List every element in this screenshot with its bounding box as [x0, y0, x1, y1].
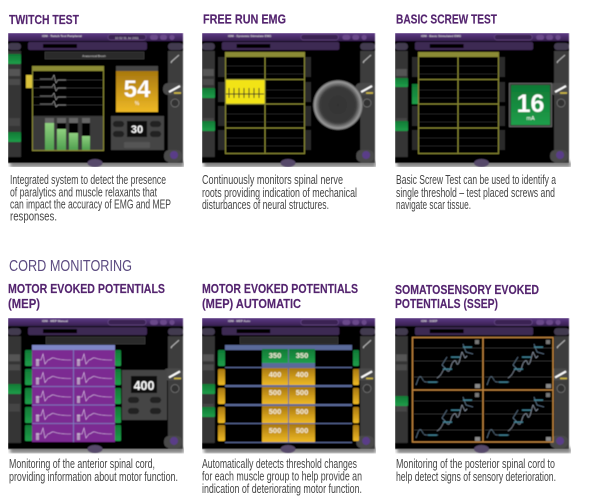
waveform and bar panel [32, 66, 104, 150]
heading: mep [8, 281, 165, 311]
ssep grid [412, 337, 554, 442]
stimulation panel [111, 116, 164, 150]
title bar: Anatomical Brush [82, 54, 106, 58]
screen: mep: IOM - MEP Manual [42, 319, 68, 323]
threshold grid: 500 [269, 388, 281, 397]
title bar [45, 52, 144, 59]
sidebar buttons [395, 78, 408, 131]
heading: ssep: POTENTIALS (SSEP) [395, 296, 498, 311]
caption: twitch test: can impact the accuracy of EMG and MEP [10, 198, 171, 212]
caption: mep: Monitoring of the anterior spinal cord, [9, 457, 155, 471]
screen: twitch test [8, 33, 184, 167]
caption: free run emg: disturbances of neural structures. [202, 198, 329, 212]
heading: twitch test: TWITCH TEST [9, 12, 79, 27]
caption: free run emg: roots providing indication of mechanical [202, 186, 357, 200]
screen: ssep [395, 318, 571, 453]
caption: basic screw test: navigate scar tissue. [396, 198, 471, 212]
title bar [46, 337, 145, 344]
title bar [240, 337, 338, 344]
heading: ssep: SOMATOSENSORY EVOKED [395, 282, 539, 297]
threshold readout: mA [526, 116, 535, 122]
caption: mep automatic: indication of deteriorating motor function. [202, 482, 362, 496]
ratio readout: % [135, 101, 140, 107]
threshold grid: 500 [296, 426, 308, 435]
stimulation panel [122, 370, 167, 420]
threshold grid: 400 [269, 370, 281, 379]
caption: mep [9, 457, 178, 484]
screen: free run emg: IOM - Systemic Stimulate EMG [228, 34, 272, 38]
threshold readout: 16 [517, 90, 544, 118]
caption: twitch test: of paralytics and muscle relaxants that [10, 186, 157, 200]
threshold grid: 350 [296, 351, 308, 360]
heading: mep automatic: (MEP) AUTOMATIC [202, 296, 302, 311]
threshold grid: 400 [296, 370, 308, 379]
threshold grid [218, 345, 359, 443]
screen: mep [8, 318, 184, 453]
heading: mep: (MEP) [8, 296, 40, 311]
caption: mep: providing information about motor function. [9, 470, 178, 484]
heading: mep: MOTOR EVOKED POTENTIALS [8, 281, 165, 296]
heading: free run emg: FREE RUN EMG [203, 12, 286, 26]
screen: mep automatic: IOM - MEP Auto [228, 319, 250, 323]
heading: mep automatic [202, 281, 358, 311]
stimulation panel: 30 [131, 124, 143, 136]
caption: mep automatic [202, 457, 362, 496]
threshold grid: 500 [269, 426, 281, 435]
emg grid [218, 52, 311, 154]
screen: basic screw test: IOM - Basic Stimulated EMG [421, 34, 462, 38]
yellow tab [26, 75, 32, 88]
spinal sphere [313, 80, 363, 130]
heading: mep automatic: MOTOR EVOKED POTENTIALS [202, 281, 358, 296]
section heading: cord monitoring: CORD MONITORING [9, 258, 132, 275]
threshold readout [510, 84, 552, 126]
caption: mep automatic: for each muscle group to help provide an [202, 470, 362, 484]
stimulation panel: 400 [134, 379, 154, 393]
threshold grid: 500 [296, 407, 308, 416]
threshold grid: 500 [269, 407, 281, 416]
sidebar buttons [202, 88, 215, 131]
caption: twitch test: Integrated system to detect the presence [10, 173, 166, 187]
sidebar buttons [395, 396, 408, 406]
threshold grid: 350 [269, 351, 281, 360]
heading: basic screw test: BASIC SCREW TEST [396, 12, 497, 26]
screen: twitch test: 10:32 31 Jul 2011 [115, 36, 139, 40]
caption: twitch test: responses. [10, 210, 57, 224]
caption: free run emg [202, 173, 357, 212]
sidebar buttons [202, 384, 215, 417]
ratio readout: 54 [124, 76, 151, 103]
caption: twitch test [10, 173, 171, 224]
screen: mep automatic [202, 318, 376, 453]
screen: basic screw test [395, 33, 571, 167]
threshold grid: 500 [296, 388, 308, 397]
ratio readout [116, 66, 158, 112]
screen: ssep: IOM - SSEP [421, 319, 437, 323]
caption: mep automatic: Automatically detects threshold changes [202, 457, 357, 471]
sidebar buttons [8, 384, 21, 394]
screen: free run emg [202, 33, 376, 167]
emg grid [412, 52, 505, 154]
heading: ssep [395, 282, 539, 311]
sidebar buttons [8, 54, 21, 142]
caption: free run emg: Continuously monitors spinal nerve [202, 173, 343, 187]
screen: twitch test: IOM - Twitch Test Peripheral [42, 34, 82, 38]
mep grid [25, 345, 121, 442]
caption: ssep [396, 457, 556, 484]
caption: basic screw test [396, 173, 556, 212]
